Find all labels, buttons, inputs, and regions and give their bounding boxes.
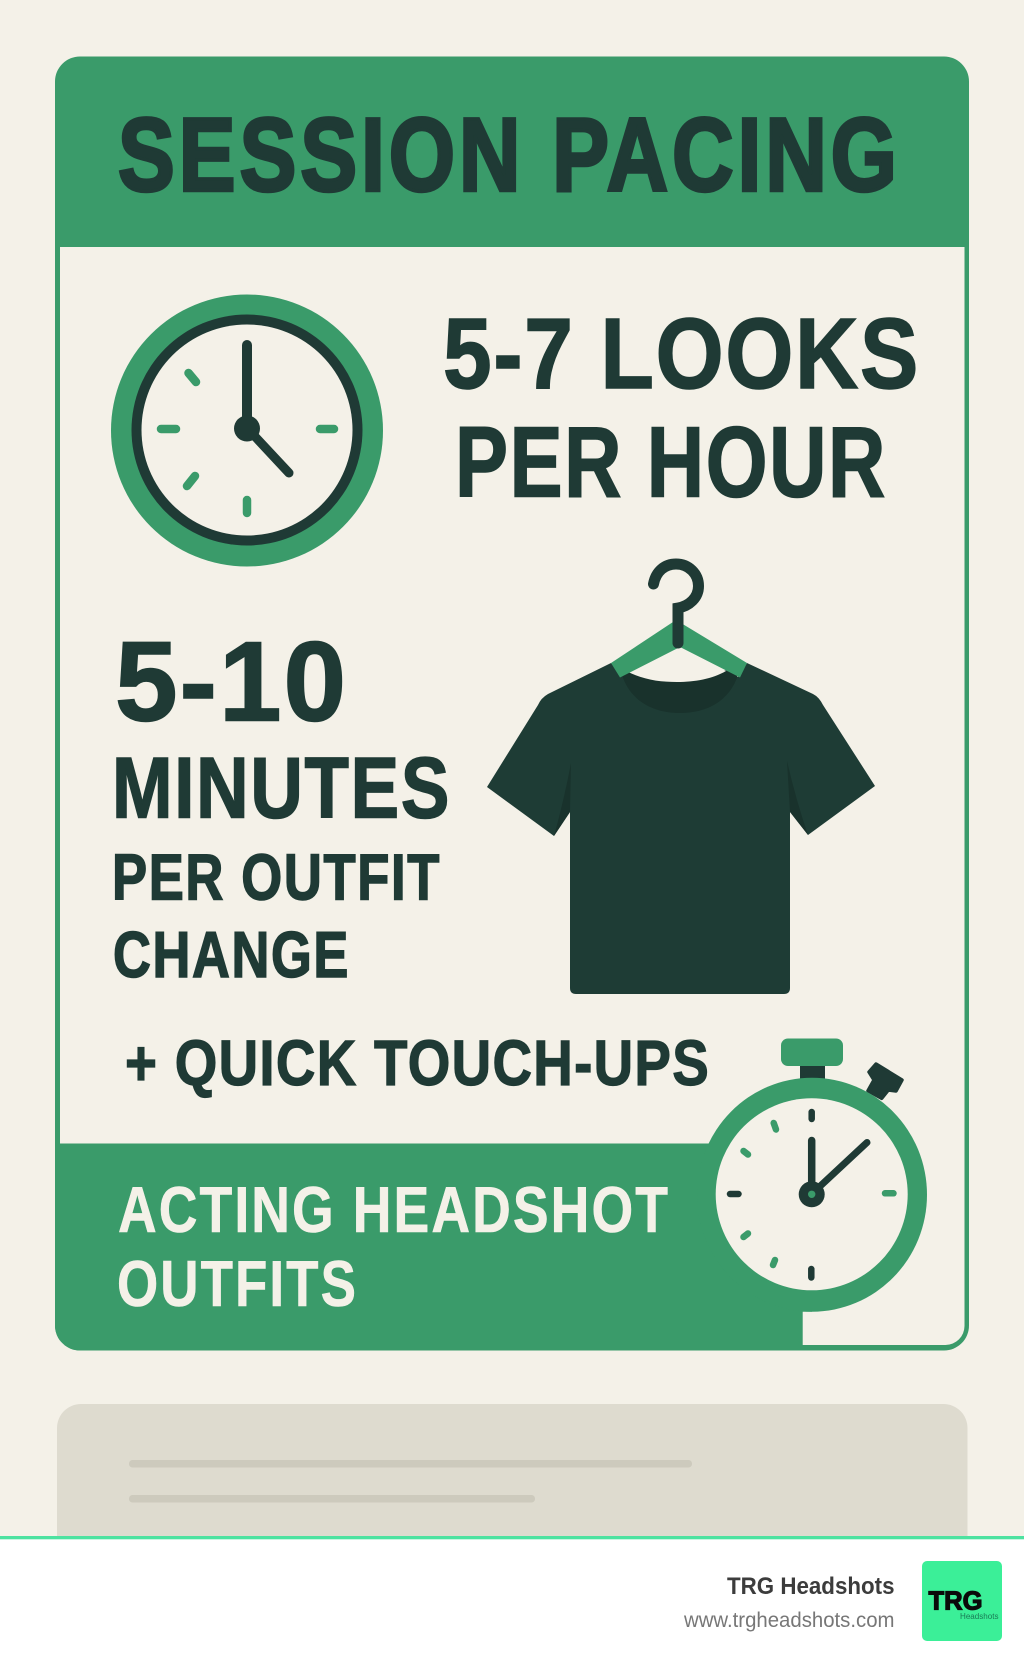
neck opening (628, 644, 726, 682)
hanger arms (611, 620, 747, 678)
panel: session pacing card (55, 56, 969, 1350)
panel: placeholder box (57, 1404, 968, 1536)
brand footer (0, 1536, 1024, 1666)
footer band of card (55, 1144, 812, 1350)
band label: acting headshot outfits (117, 1173, 670, 1320)
brand url: www.trgheadshots.com (683, 1609, 894, 1632)
headline: looks per hour (443, 298, 920, 518)
logo (922, 1561, 1002, 1641)
stat: minutes per outfit change: PER OUTFIT (112, 840, 441, 914)
icon: wall clock (111, 294, 383, 566)
t-shirt collar (622, 670, 738, 713)
icon: stopwatch (697, 1038, 927, 1312)
icon: t-shirt on hanger (487, 564, 875, 994)
text: quick touch-ups: + QUICK TOUCH-UPS (125, 1027, 710, 1099)
stat: minutes per outfit change: MINUTES (112, 740, 451, 836)
logo: TRG (928, 1586, 982, 1616)
band label: acting headshot outfits: OUTFITS (117, 1247, 358, 1320)
stat: minutes per outfit change (112, 618, 451, 991)
t-shirt (487, 663, 875, 994)
headline: looks per hour: PER HOUR (455, 406, 887, 518)
stat: minutes per outfit change: 5-10 (115, 618, 348, 744)
headline: looks per hour: 5-7 LOOKS (443, 298, 920, 410)
brand name: TRG Headshots (727, 1573, 894, 1600)
logo: Headshots (960, 1612, 998, 1621)
stat: minutes per outfit change: CHANGE (113, 918, 350, 991)
hanger hook (654, 564, 698, 643)
band label: acting headshot outfits: ACTING HEADSHOT (118, 1173, 670, 1246)
